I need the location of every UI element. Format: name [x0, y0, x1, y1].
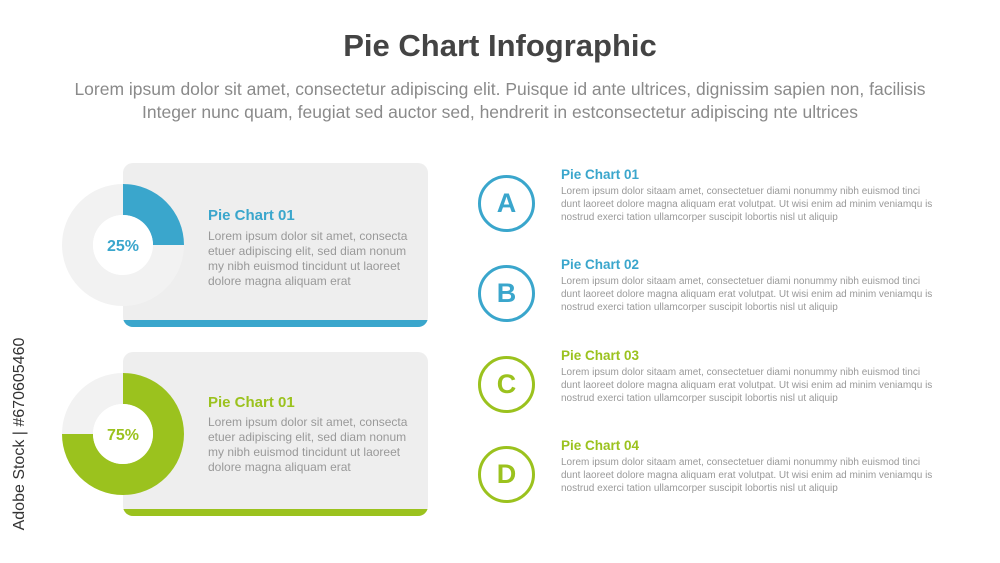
icon: circle D	[478, 446, 535, 503]
item A heading: Pie Chart 01	[561, 167, 639, 182]
item C	[478, 348, 932, 413]
icon: circle C	[478, 356, 535, 413]
subtitle: Integer nunc quam, feugiat sed auctor sed, hendrerit in estconsectetur adipiscing nte ultrices	[142, 102, 858, 122]
item B heading: Pie Chart 02	[561, 257, 639, 272]
panel: card 1	[123, 163, 428, 327]
subtitle: Lorem ipsum dolor sit amet, consectetur adipiscing elit. Puisque id ante ultrices, dignissim sapien non, facilisis	[74, 79, 926, 99]
icon: circle B	[478, 265, 535, 322]
card 2 heading: Pie Chart 01	[208, 394, 295, 411]
title: Pie Chart Infographic	[343, 28, 657, 63]
item B text: Lorem ipsum dolor sitaam amet, consectetuer diami nonummy nibh euismod tinci dunt laoreet dolore magna aliquam erat volutpat. Ut wisi enim ad minim veniamqu is nostrud exerci tation ullamcorper suscipit lobortis nisl ut aliquip	[561, 276, 932, 313]
item C text: Lorem ipsum dolor sitaam amet, consectetuer diami nonummy nibh euismod tinci dunt laoreet dolore magna aliquam erat volutpat. Ut wisi enim ad minim veniamqu is nostrud exerci tation ullamcorper suscipit lobortis nisl ut aliquip	[561, 367, 932, 404]
item D text: Lorem ipsum dolor sitaam amet, consectetuer diami nonummy nibh euismod tinci dunt laoreet dolore magna aliquam erat volutpat. Ut wisi enim ad minim veniamqu is nostrud exerci tation ullamcorper suscipit lobortis nisl ut aliquip	[561, 457, 932, 494]
chart: donut 25%: 25%	[107, 238, 139, 255]
watermark side text: Adobe Stock | #670605460	[11, 338, 28, 530]
icon: circle A	[478, 175, 535, 232]
panel: card 2	[123, 352, 428, 516]
chart: donut 75%	[62, 373, 184, 495]
card 2 text: Lorem ipsum dolor sit amet, consecta etuer adipiscing elit, sed diam nonum my nibh euismod tincidunt ut laoreet dolore magna aliquam erat	[208, 415, 407, 474]
item B	[478, 257, 932, 322]
card 1 bar	[123, 320, 428, 327]
item A	[478, 167, 932, 232]
item C heading: Pie Chart 03	[561, 348, 639, 363]
icon: circle A: A	[497, 188, 516, 218]
icon: circle B: B	[497, 278, 516, 308]
chart: donut 75%: 75%	[107, 427, 139, 444]
icon: circle C: C	[497, 369, 516, 399]
card 1 heading: Pie Chart 01	[208, 207, 295, 224]
item D heading: Pie Chart 04	[561, 438, 639, 453]
card 1 text: Lorem ipsum dolor sit amet, consecta etuer adipiscing elit, sed diam nonum my nibh euismod tincidunt ut laoreet dolore magna aliquam erat	[208, 229, 407, 288]
item A text: Lorem ipsum dolor sitaam amet, consectetuer diami nonummy nibh euismod tinci dunt laoreet dolore magna aliquam erat volutpat. Ut wisi enim ad minim veniamqu is nostrud exerci tation ullamcorper suscipit lobortis nisl ut aliquip	[561, 186, 932, 223]
chart: donut 25%	[62, 184, 184, 306]
item D	[478, 438, 932, 503]
card 2 bar	[123, 509, 428, 516]
subtitle	[74, 79, 926, 122]
icon: circle D: D	[497, 459, 516, 489]
